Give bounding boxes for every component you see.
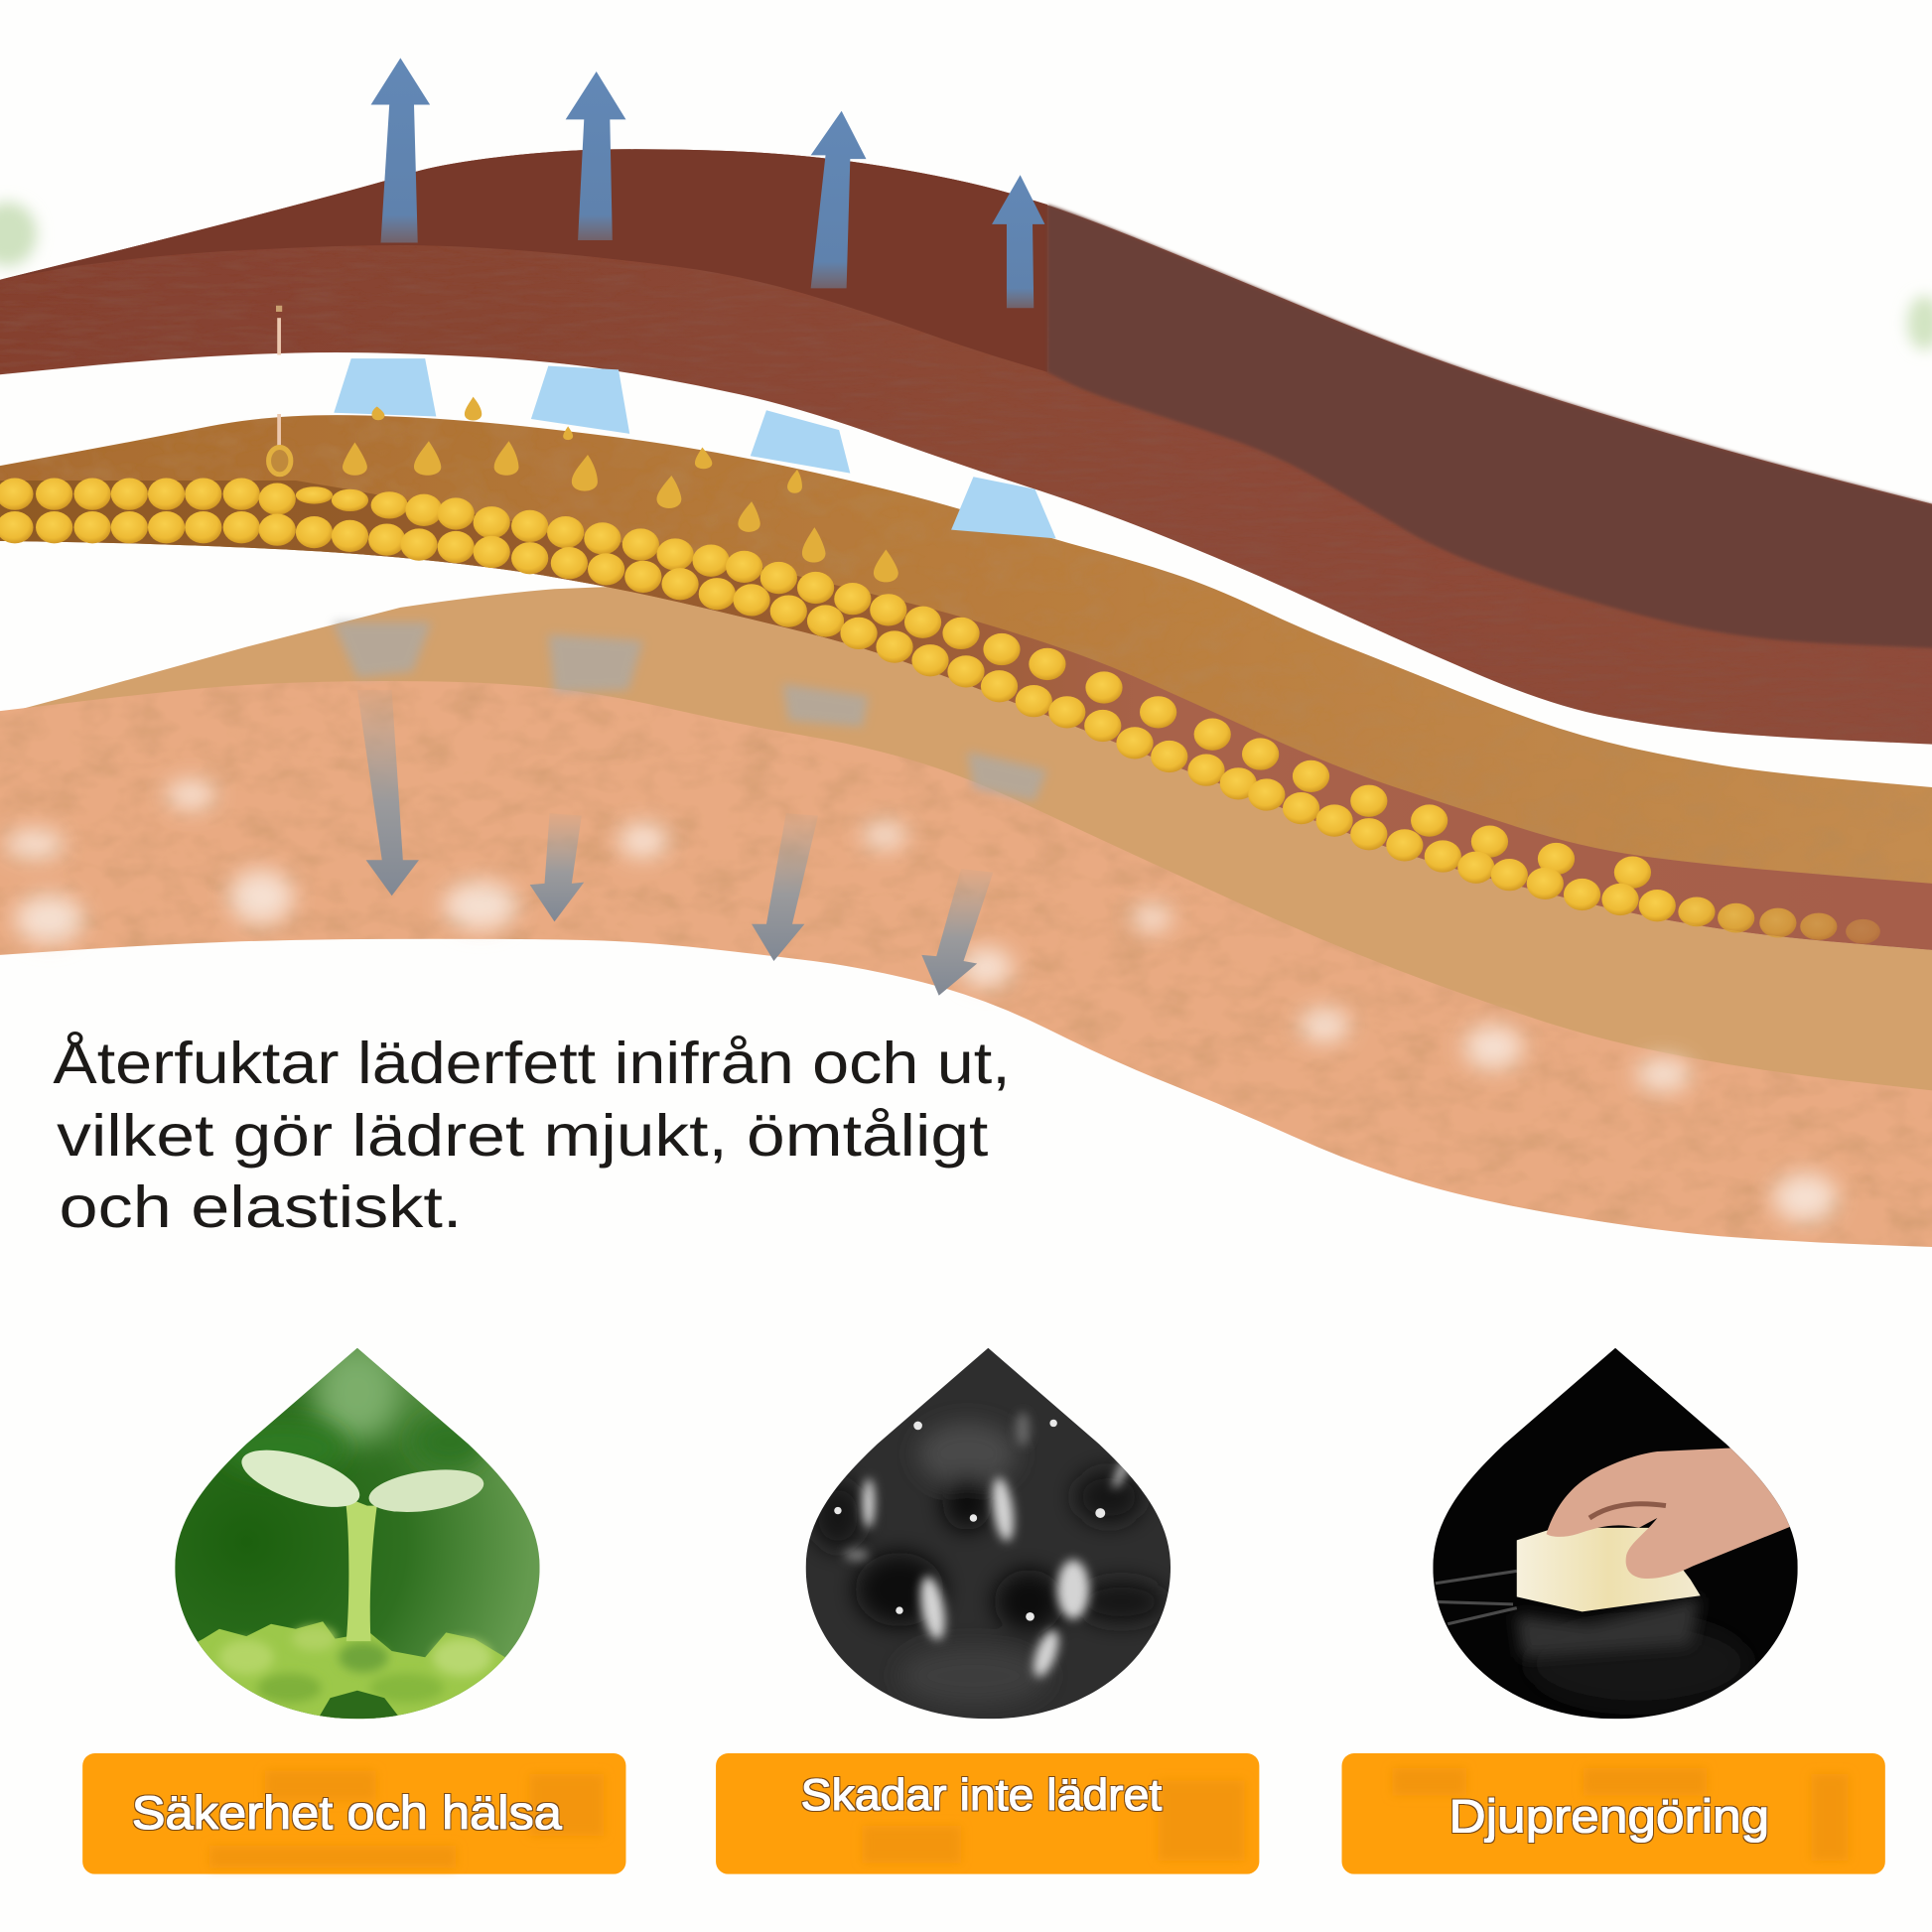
text block: description: och elastiskt. (60, 1173, 462, 1240)
layer: dark top band right (1047, 205, 1932, 649)
layer: sphere bed (0, 481, 1932, 950)
down arrow 4 (921, 869, 993, 996)
yellow oil droplets (343, 397, 898, 582)
hand (1547, 1448, 1796, 1579)
layer: lower tan dermis (0, 587, 1932, 1097)
sponge (1517, 1528, 1701, 1611)
moss (185, 1621, 505, 1725)
tufts (834, 1420, 1105, 1621)
salmon highlights (5, 780, 1837, 1222)
stem (345, 1497, 377, 1641)
button: Säkerhet och hälsa: Säkerhet och hälsa (132, 1786, 563, 1839)
pore tube (269, 306, 291, 475)
text block: description: vilket gör lädret mjukt, ömtåligt (57, 1102, 989, 1169)
finger crease (1589, 1504, 1666, 1518)
button: Säkerhet och hälsa (82, 1753, 625, 1874)
right leaf (369, 1469, 484, 1512)
water pockets in white band (334, 358, 1056, 538)
layer: salmon base (0, 681, 1932, 1247)
icon: sponge on leather drop (1430, 1343, 1805, 1725)
yellow fat spheres (0, 479, 1880, 944)
button: Skadar inte lädret (716, 1753, 1259, 1874)
decorative leaf blur right (1907, 296, 1932, 349)
up arrow 4 (992, 175, 1044, 308)
button: Skadar inte lädret: Skadar inte lädret (801, 1771, 1163, 1820)
faded water pockets (333, 622, 1047, 801)
layer: red-brown textured leather (0, 149, 1932, 745)
up arrow 2 (566, 71, 625, 240)
up arrow 3 (811, 111, 866, 288)
text block: description: Återfuktar läderfett inifrån och ut, (53, 1030, 1011, 1096)
button: Djuprengöring (1342, 1753, 1885, 1874)
decorative leaf blur left (0, 203, 37, 266)
leather shadow (1528, 1619, 1749, 1708)
icon: tufted leather drop (801, 1343, 1176, 1725)
down arrow 1 (357, 690, 419, 896)
down arrow 2 (530, 813, 584, 921)
left leaf (241, 1449, 359, 1507)
icon: seedling drop (175, 1348, 540, 1720)
panel: leather cross-section (0, 149, 1932, 1247)
text block: description (53, 1030, 1011, 1240)
up arrow 1 (371, 58, 430, 242)
layer: tan fat layer (0, 415, 1932, 950)
down arrow 3 (752, 813, 818, 961)
moss hollow (318, 1691, 400, 1719)
layer: dark top band left (0, 149, 1047, 372)
button: Djuprengöring: Djuprengöring (1449, 1789, 1769, 1842)
